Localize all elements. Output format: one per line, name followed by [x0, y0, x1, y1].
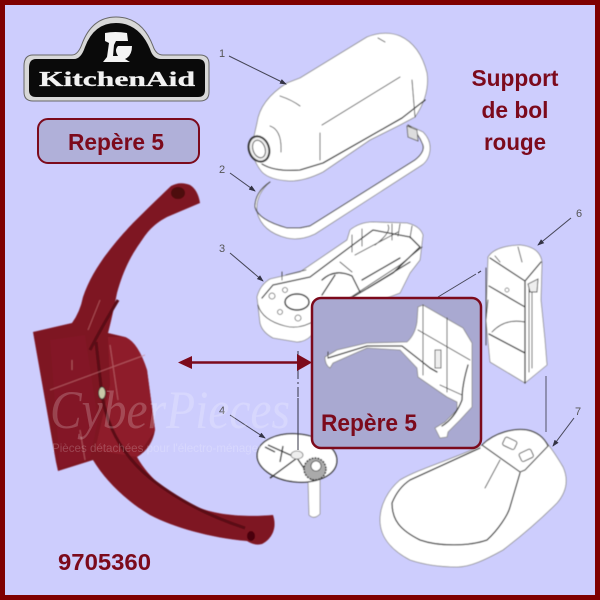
callout labels and leader arrows: 1: [219, 48, 225, 60]
icon: stand mixer: [103, 32, 132, 62]
KitchenAid logo: [24, 17, 209, 101]
line drawing of the support: [325, 305, 472, 438]
part 6: column: [486, 245, 547, 383]
exploded diagram parts: [245, 33, 566, 567]
logo wordmark: KitchenAid: [39, 67, 195, 91]
callout labels and leader arrows: [219, 48, 582, 450]
callout labels and leader arrows: 2: [219, 164, 225, 176]
part 1: housing: [245, 33, 428, 181]
double-headed red arrow: [178, 354, 312, 371]
watermark: CyberPieces: CyberPieces: [50, 380, 290, 440]
red bowl support photo: [33, 183, 275, 545]
part number: 9705360: [58, 549, 151, 575]
part 3: base shell: [257, 222, 423, 342]
heading: Support de bol rouge: de bol: [482, 97, 548, 123]
part 2: gasket band: [255, 125, 430, 239]
badge: Repère 5: Repère 5: [68, 129, 164, 155]
highlight box: Repère 5: [312, 298, 481, 448]
callout labels and leader arrows: 4: [219, 405, 225, 417]
watermark: CyberPieces: Pièces détachées pour l'électro-ménager: [52, 441, 262, 455]
callout labels and leader arrows: 3: [219, 243, 225, 255]
heading: Support de bol rouge: Support: [472, 65, 559, 91]
part 4: drive disk: [255, 430, 339, 517]
callout labels and leader arrows: 6: [576, 208, 582, 220]
badge: Repère 5: [38, 119, 199, 163]
heading: Support de bol rouge: rouge: [484, 129, 546, 155]
part 7: foot: [380, 430, 566, 567]
callout labels and leader arrows: 7: [575, 406, 581, 418]
box caption: Repère 5: [321, 410, 417, 437]
heading: Support de bol rouge: [472, 65, 559, 155]
